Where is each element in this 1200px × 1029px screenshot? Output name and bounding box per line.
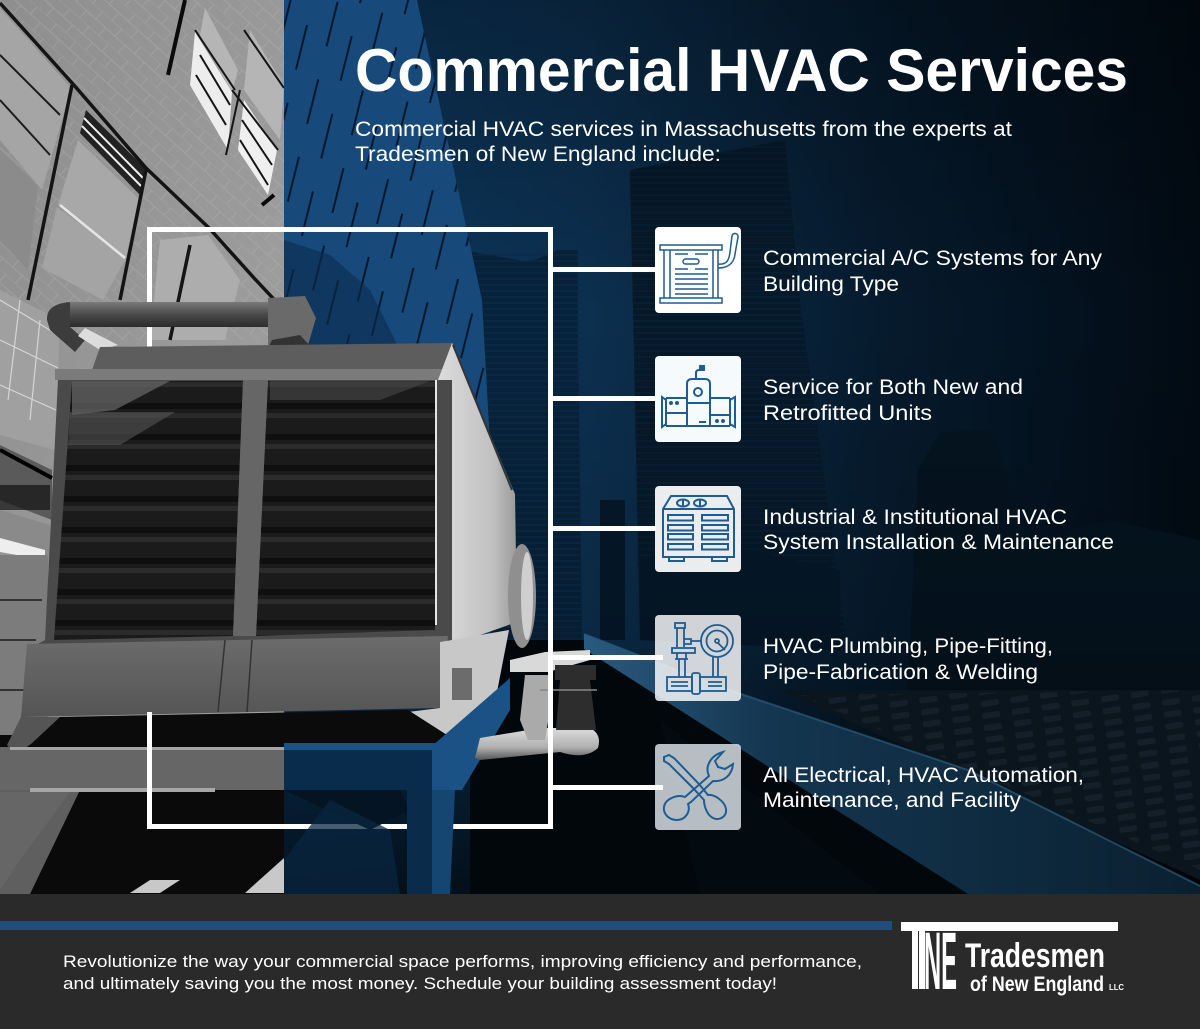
steel support frame gray part bbox=[0, 747, 284, 792]
connector lines bbox=[553, 267, 656, 790]
window row lower-left bbox=[0, 8, 240, 340]
white bracket frame bbox=[150, 230, 550, 826]
label: Pipe-Fabrication & Welding bbox=[763, 660, 1038, 684]
label: System Installation & Maintenance bbox=[763, 530, 1114, 554]
photo: rooftop HVAC unit bbox=[7, 296, 536, 755]
blue accent bar bbox=[0, 921, 892, 930]
icon: air handler bbox=[655, 227, 741, 313]
left dark side structure bbox=[0, 445, 52, 520]
logo: of New England bbox=[970, 973, 1104, 996]
top pipe bbox=[47, 296, 316, 352]
intro text: Commercial HVAC services in Massachusetts from the experts at bbox=[355, 117, 1012, 141]
logo: LLC bbox=[1109, 983, 1124, 992]
icon: condenser cabinet bbox=[655, 486, 741, 572]
logo: Tradesmen bbox=[965, 937, 1105, 975]
footer text: and ultimately saving you the most money. Schedule your building assessment today! bbox=[63, 974, 777, 993]
footer text bbox=[63, 952, 862, 993]
title: Commercial HVAC Services bbox=[355, 37, 1128, 104]
front frame bbox=[27, 380, 452, 650]
service 3: industrial and institutional bbox=[655, 486, 1114, 572]
label bbox=[763, 763, 1084, 812]
label: Maintenance, and Facility bbox=[763, 788, 1021, 812]
service 5: electrical and automation bbox=[655, 744, 1084, 830]
label: Retrofitted Units bbox=[763, 401, 932, 425]
upper windows bbox=[168, 0, 284, 205]
label bbox=[763, 634, 1053, 684]
left gusset bbox=[7, 717, 70, 755]
top cover bbox=[90, 343, 453, 376]
service 2: new and retrofitted bbox=[655, 356, 1023, 442]
underside shadow bbox=[30, 710, 447, 745]
fan housing bbox=[508, 544, 536, 648]
label: Building Type bbox=[763, 272, 899, 296]
service 1: commercial A/C bbox=[655, 227, 1102, 313]
ground shadow bbox=[0, 735, 284, 894]
label bbox=[763, 505, 1114, 554]
low buildings by horizon bbox=[600, 500, 840, 650]
center column bbox=[233, 380, 268, 636]
repeated connector tips over icons 4 and 5 bbox=[655, 655, 663, 790]
large central tower bbox=[630, 140, 846, 640]
service 4: plumbing and welding bbox=[655, 615, 1053, 701]
right louver panel bbox=[256, 381, 435, 636]
skyscraper cluster left bbox=[472, 250, 582, 640]
side panel bbox=[438, 343, 517, 645]
bottom pipes bbox=[475, 650, 599, 760]
bracket frame lower-left edge over the beam bbox=[147, 712, 152, 829]
right frame edge bbox=[548, 227, 553, 829]
background: city skyline in navy bbox=[284, 0, 1200, 894]
icon: packaged unit bbox=[655, 356, 741, 442]
intro text: Tradesmen of New England include: bbox=[355, 142, 721, 166]
roadway and railing bbox=[470, 634, 1200, 894]
intro text bbox=[355, 117, 1012, 166]
label: Industrial & Institutional HVAC bbox=[763, 505, 1067, 529]
diagonal dark frame lines bbox=[0, 3, 284, 340]
logo: NE bbox=[924, 916, 957, 1007]
icon: pipe fitting with gauge bbox=[655, 615, 741, 701]
logo bbox=[901, 916, 1124, 1007]
label bbox=[763, 246, 1102, 296]
label: Commercial A/C Systems for Any bbox=[763, 246, 1102, 270]
building wall: grayscale half bbox=[0, 0, 284, 894]
base plate bbox=[21, 636, 448, 717]
left louver panel bbox=[54, 381, 243, 640]
icon: crossed wrench and screwdriver bbox=[655, 744, 741, 830]
lower right panel bbox=[408, 630, 509, 735]
label: All Electrical, HVAC Automation, bbox=[763, 763, 1084, 787]
label: Service for Both New and bbox=[763, 375, 1023, 399]
label bbox=[763, 375, 1023, 425]
steel support frame blue part bbox=[284, 678, 510, 894]
lower brick wall bbox=[0, 290, 60, 450]
footer text: Revolutionize the way your commercial space performs, improving efficiency and performance, bbox=[63, 952, 862, 971]
building wall: blue half bbox=[284, 0, 492, 640]
label: HVAC Plumbing, Pipe-Fitting, bbox=[763, 634, 1053, 658]
distant right towers bbox=[900, 430, 1200, 780]
footer band bbox=[0, 894, 1200, 1029]
parking lot bbox=[780, 690, 1200, 880]
